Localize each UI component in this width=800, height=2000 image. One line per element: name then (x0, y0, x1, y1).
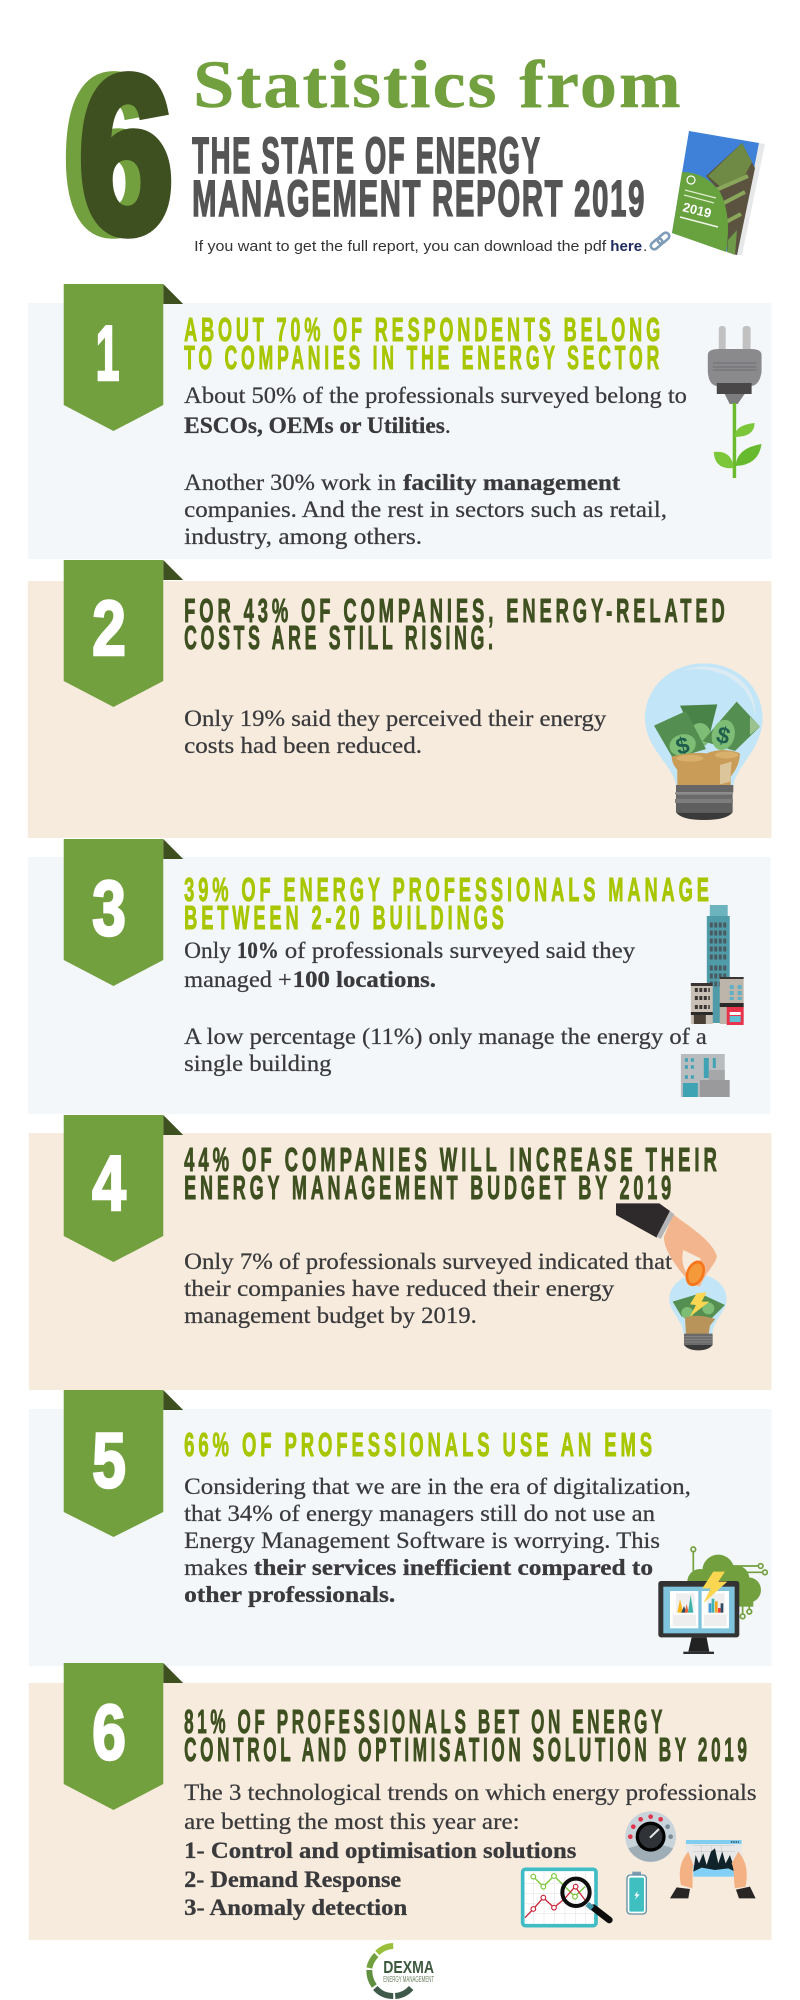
heading 4 (184, 1141, 721, 1206)
body text 5: that 34% of energy managers still do not use an (184, 1501, 655, 1527)
body text 1: About 50% of the professionals surveyed belong to (184, 383, 687, 409)
icon: light bulb with money: $ (673, 731, 692, 760)
body text 5: Considering that we are in the era of digitalization, (184, 1474, 691, 1500)
ribbon number 6: 6 (92, 1690, 126, 1776)
panel: statistic 2 (28, 560, 772, 838)
body text 6: are betting the most this year are: (184, 1809, 520, 1835)
body text 6: 2- Demand Response (184, 1867, 401, 1893)
body text 3: of professionals surveyed said they (285, 938, 635, 964)
ribbon number 1: 1 (96, 311, 119, 397)
ribbon number 3 (64, 839, 183, 986)
ribbon number 2: 2 (92, 586, 126, 672)
body text 4: Only 7% of professionals surveyed indicated that (184, 1249, 672, 1275)
title: Statistics from: Statistics from (193, 47, 683, 122)
panel: statistic 4 (29, 1115, 772, 1390)
body text 6 (184, 1780, 757, 1921)
icon: hands holding tablet (670, 1840, 756, 1898)
icon: hand dropping coin into bulb (616, 1203, 727, 1350)
body text 1: companies. And the rest in sectors such as retail, (184, 497, 667, 523)
ribbon number 5 (64, 1390, 183, 1537)
heading 2 (184, 592, 729, 656)
body text 1: ESCOs, OEMs or Utilities. (184, 413, 451, 439)
body text 5: Energy Management Software is worrying. This (184, 1528, 660, 1554)
ribbon number 6 (64, 1663, 183, 1810)
heading 3 (184, 871, 713, 936)
body text 1 (184, 383, 687, 550)
body text 6: 3- Anomaly detection (184, 1895, 407, 1921)
body text 4: management budget by 2019. (184, 1303, 477, 1329)
body text 5: their services inefficient compared to (254, 1555, 653, 1581)
download note: here (610, 238, 642, 255)
body text 3: 100 locations. (293, 967, 436, 993)
body text 2 (184, 706, 607, 759)
logo: Dexma Energy Management: ENERGY MANAGEMENT (383, 1975, 434, 1984)
heading 6 (184, 1703, 751, 1768)
body text 4 (184, 1249, 672, 1329)
body text 2: costs had been reduced. (184, 733, 422, 759)
body text 1: industry, among others. (184, 524, 422, 550)
icon: light bulb with money: $ (714, 721, 733, 750)
body text 1: facility management (403, 470, 620, 496)
body text 3: A low percentage (11%) only manage the energy of a (184, 1024, 707, 1050)
body text 2: Only 19% said they perceived their energy (184, 706, 607, 732)
icon: report cover: 2019 (681, 199, 713, 221)
body text 6: 1- Control and optimisation solutions (184, 1838, 576, 1864)
panel: statistic 3 (28, 839, 771, 1114)
panel: statistic 6 (29, 1663, 772, 1940)
ribbon number 4: 4 (92, 1141, 126, 1227)
header (63, 30, 765, 280)
icon: city buildings (691, 905, 744, 1025)
body text 4: their companies have reduced their energy (184, 1276, 615, 1302)
download note: . (643, 238, 647, 255)
icon: plug with plant stem (708, 326, 762, 478)
heading 1 (184, 311, 664, 376)
icon: report cover (672, 131, 765, 255)
body text 5: other professionals. (184, 1582, 395, 1608)
icon: light bulb with money (645, 663, 763, 820)
body text 1: Another 30% work in (184, 470, 396, 496)
ribbon number 2 (64, 560, 183, 707)
icon: single building (681, 1054, 730, 1097)
body text 3 (184, 938, 707, 1077)
body text 3: 10% (237, 938, 279, 964)
ribbon number 5: 5 (92, 1418, 126, 1504)
body text 3: Only (184, 938, 231, 964)
subtitle: report name (192, 127, 646, 227)
icon: battery (627, 1872, 646, 1914)
body text 5: makes (184, 1555, 248, 1581)
logo: Dexma Energy Management (369, 1946, 434, 1996)
body text 3: managed + (184, 967, 292, 993)
body text 3: single building (184, 1051, 332, 1077)
download note: If you want to get the full report, you can download the pdf (194, 238, 607, 255)
heading 3: BETWEEN 2-20 BUILDINGS (184, 899, 508, 936)
panel: statistic 1 (28, 284, 772, 559)
big number 6: 6 (78, 30, 174, 280)
logo: Dexma Energy Management: DEXMA (383, 1957, 434, 1977)
body text 5 (184, 1474, 691, 1608)
body text 6: The 3 technological trends on which energy professionals (184, 1780, 757, 1806)
heading 2: COSTS ARE STILL RISING. (184, 619, 497, 656)
ribbon number 4 (64, 1115, 183, 1262)
panel: statistic 5 (29, 1390, 772, 1666)
icon: monitor with cloud and lightning (658, 1547, 767, 1654)
icon: chart with magnifier (523, 1869, 609, 1926)
icon: dial (625, 1811, 676, 1862)
icon: link (649, 231, 671, 251)
ribbon number 1 (64, 284, 183, 431)
big number 6: 6 (63, 30, 159, 280)
ribbon number 3: 3 (92, 866, 126, 952)
icons: technology trends (523, 1811, 756, 1926)
